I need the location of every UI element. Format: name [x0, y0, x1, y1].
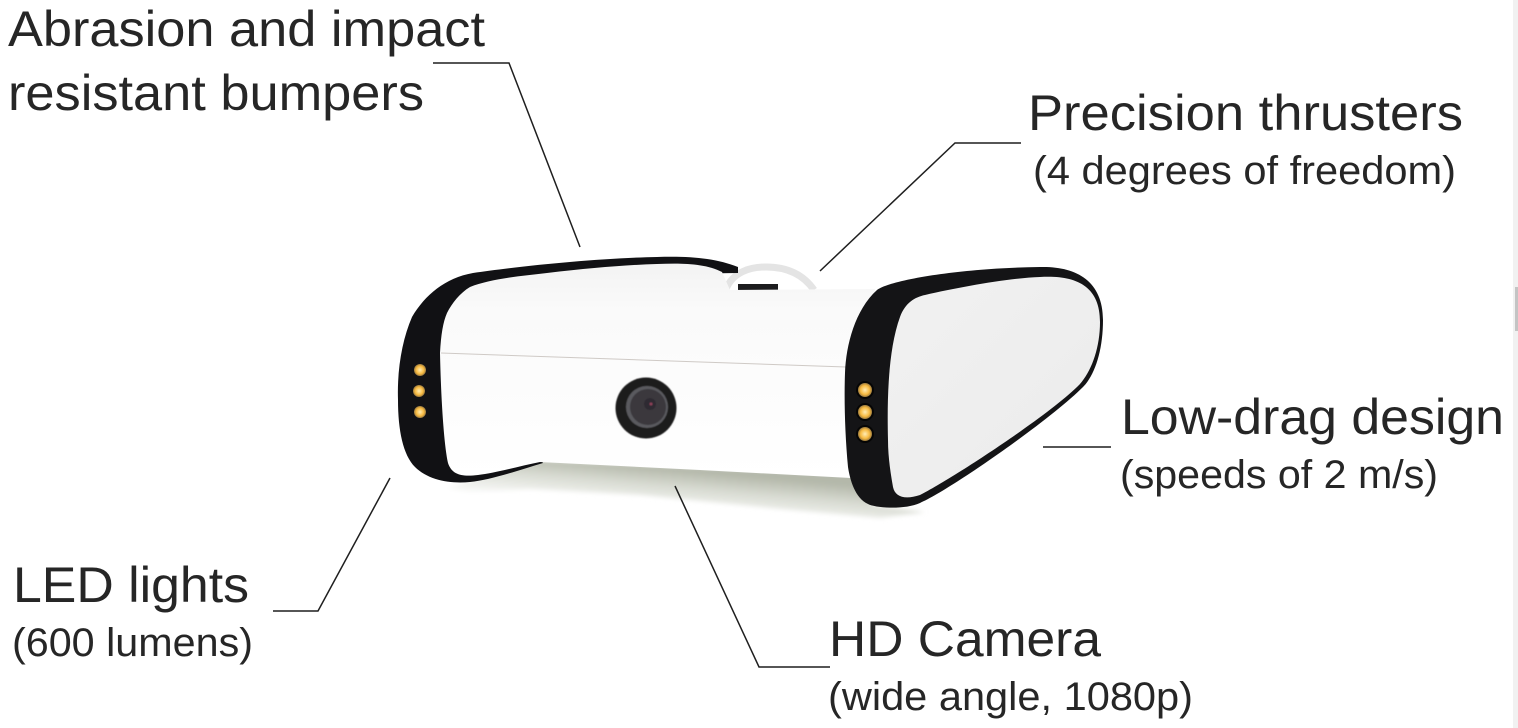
browser scrollbar: [1513, 0, 1518, 728]
main body: [440, 264, 875, 478]
tether handle: [726, 267, 814, 291]
body seam: [441, 353, 846, 367]
leader line: LED lights: [273, 478, 390, 611]
detail: LED lights: (600 lumens): [12, 621, 253, 665]
right bumper: [845, 267, 1103, 508]
left bumper: [398, 257, 738, 482]
leader line: low-drag design: [1043, 446, 1111, 448]
heading: low-drag design: Low-drag design: [1121, 389, 1504, 445]
callout: thrusters: [820, 85, 1463, 271]
callout: HD camera: [675, 486, 1193, 719]
heading: LED lights: LED lights: [13, 557, 249, 613]
right LED lights: [856, 381, 874, 443]
right side panel: [888, 277, 1100, 497]
heading: thrusters: Precision thrusters: [1028, 85, 1463, 141]
leader line: HD camera: [675, 486, 830, 667]
heading line two: bumpers: resistant bumpers: [8, 65, 424, 121]
detail: thrusters: (4 degrees of freedom): [1033, 149, 1456, 193]
heading: bumpers: Abrasion and impact: [8, 1, 485, 57]
detail: HD camera: (wide angle, 1080p): [828, 675, 1193, 719]
detail: low-drag design: (speeds of 2 m/s): [1120, 453, 1438, 497]
drone ground shadow: [447, 460, 925, 518]
heading: HD camera: HD Camera: [829, 611, 1101, 667]
callout: LED lights: [12, 478, 390, 665]
product: underwater drone: [398, 257, 1103, 518]
leader line: thrusters: [820, 143, 1021, 271]
callout: low-drag design: [1043, 389, 1504, 497]
camera lens: [616, 378, 676, 438]
leader line: bumpers: [433, 63, 580, 247]
left LED lights: [413, 364, 426, 418]
callout: bumpers: [8, 1, 580, 247]
